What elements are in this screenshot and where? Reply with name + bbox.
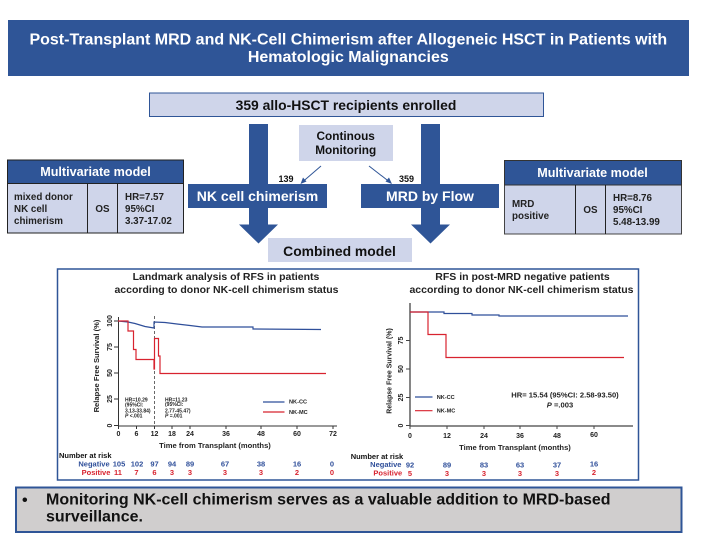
label: 359: 359 (399, 174, 414, 184)
hazard ratio note: P =.003 (547, 400, 573, 410)
y axis tick labels: 50 (107, 369, 114, 377)
title banner: Post-Transplant MRD and NK-Cell Chimerism after Allogeneic HSCT in Patients with (29, 32, 667, 48)
number at risk table: 7 (134, 468, 139, 477)
hazard ratio note: after landmark (165, 398, 191, 420)
number at risk table: 94 (168, 460, 177, 468)
combined model box: Combined model (283, 243, 396, 259)
x axis tick labels: 18 (168, 431, 176, 438)
legend: NK-CC (437, 395, 455, 401)
NK cell chimerism box (188, 184, 327, 208)
number at risk table: 102 (131, 460, 143, 468)
panel: right multivariate table: positive (512, 211, 550, 222)
hazard ratio note: after landmark: 2.77-45.47) (165, 408, 191, 414)
number at risk table: 2 (295, 468, 299, 477)
number at risk table: 3 (518, 469, 522, 478)
x axis tick labels: 36 (516, 433, 524, 440)
panel: left multivariate table (8, 160, 184, 233)
x axis tick labels: 60 (590, 432, 598, 439)
number at risk table: 83 (480, 460, 488, 470)
number at risk table (351, 452, 598, 478)
conclusion callout: surveillance. (46, 508, 143, 526)
number at risk table: 97 (150, 460, 159, 468)
continuous monitoring box (299, 125, 393, 161)
number at risk table: 3 (170, 468, 174, 477)
panel: right multivariate table: MRD (512, 199, 534, 210)
x axis tick labels: 24 (186, 431, 194, 438)
x axis tick labels: 12 (443, 433, 451, 440)
x axis tick labels: 24 (480, 433, 488, 440)
panel: left multivariate table: NK cell (14, 204, 47, 215)
panel: right multivariate table: 95%CI (613, 205, 643, 216)
arrow: monitoring to MRD by flow (369, 166, 392, 184)
legend: NK-CC (289, 400, 307, 406)
chart title: post-MRD negative (409, 271, 634, 296)
chart title: post-MRD negative: according to donor NK-cell chimerism status (409, 284, 634, 296)
number at risk table: 0 (330, 460, 334, 468)
curve: NK-MC left (118, 321, 326, 374)
number at risk table: 16 (590, 460, 598, 468)
continuous monitoring box: Continous (317, 129, 375, 143)
y axis tick labels: 0 (398, 423, 405, 427)
number at risk table: Negative (370, 460, 401, 469)
number at risk table: 89 (186, 460, 194, 468)
y axis tick labels: 100 (107, 315, 114, 327)
number at risk table: 105 (113, 460, 125, 468)
y axis tick labels: 50 (398, 365, 405, 373)
y axis tick labels: 75 (107, 343, 114, 351)
curve: NK-CC right (410, 312, 628, 316)
number at risk table: 5 (408, 469, 412, 478)
panel: right multivariate table: Multivariate model (537, 166, 648, 180)
number at risk table: Number at risk (59, 451, 112, 460)
x axis tick labels: 6 (135, 431, 139, 438)
y axis tick labels: 75 (398, 337, 405, 344)
hazard ratio note: before landmark: HR=10.29 (125, 398, 148, 404)
number at risk table: 16 (293, 460, 301, 468)
axes (114, 317, 337, 429)
number at risk table: Number at risk (351, 452, 404, 461)
number at risk table: Positive (373, 469, 402, 478)
y axis tick labels: 0 (107, 423, 114, 427)
legend (263, 400, 308, 416)
y axis tick labels: 25 (107, 395, 114, 403)
y axis tick labels: 25 (398, 394, 405, 401)
legend: NK-MC (437, 409, 455, 415)
arrow: left down arrow (239, 124, 278, 244)
chart title: landmark analysis (114, 271, 339, 296)
hazard ratio note: before landmark (125, 398, 151, 420)
chart: landmark analysis RFS (59, 271, 339, 477)
x axis tick labels: 60 (293, 431, 301, 438)
number at risk table (59, 451, 334, 477)
number at risk table: 3 (482, 469, 486, 478)
number at risk table: 3 (188, 468, 192, 477)
hazard ratio note: before landmark: 3.13-33.84) (125, 408, 151, 414)
number at risk table: Positive (82, 468, 110, 477)
panel: left multivariate table: chimerism (14, 216, 63, 227)
conclusion callout (16, 488, 682, 532)
number at risk table: 3 (555, 469, 559, 478)
x axis tick labels: 72 (329, 431, 337, 438)
title banner (8, 20, 689, 76)
number at risk table: 38 (257, 460, 265, 468)
number at risk table: 92 (406, 460, 414, 470)
landmark dashed line (154, 316, 156, 426)
hazard ratio note: after landmark: (95%CI: (165, 402, 184, 408)
panel: left multivariate table: 95%CI (125, 204, 155, 215)
x axis title: Time from Transplant (months) (459, 443, 571, 452)
hazard ratio note: before landmark: P <.001 (125, 414, 143, 420)
curve: NK-MC right (410, 312, 624, 358)
y axis tick labels (398, 337, 405, 427)
number at risk table: 3 (223, 468, 227, 477)
arrow: monitoring to NK cell chimerism (300, 166, 321, 184)
NK cell chimerism box: NK cell chimerism (197, 188, 318, 204)
number at risk table: 11 (114, 468, 122, 477)
arrow: right down arrow (411, 124, 450, 244)
panel: right multivariate table: OS (583, 205, 598, 216)
legend (415, 395, 455, 415)
label: 139: 139 (278, 174, 294, 184)
number at risk table: 37 (553, 460, 561, 470)
number at risk table: 89 (443, 460, 451, 470)
title banner: Hematologic Malignancies (248, 49, 449, 66)
panel: right multivariate table: 5.48-13.99 (613, 217, 660, 228)
axes (406, 303, 633, 429)
legend: NK-MC (289, 410, 308, 416)
x axis tick labels: 12 (151, 431, 158, 438)
x axis tick labels: 0 (408, 433, 412, 440)
y axis title: Relapse Free Survival (%) (386, 328, 394, 414)
panel: right multivariate table: HR=8.76 (613, 193, 652, 204)
panel: survival charts frame (58, 269, 638, 480)
hazard ratio note: before landmark: (95%CI: (125, 402, 144, 408)
number at risk table: 2 (592, 468, 596, 477)
number at risk table: 6 (152, 468, 157, 477)
number at risk table: 63 (516, 460, 524, 470)
x axis tick labels: 0 (117, 431, 121, 438)
continuous monitoring box: Monitoring (315, 143, 376, 157)
hazard ratio note: HR= 15.54 (95%CI: 2.58-93.50) (511, 391, 619, 400)
x axis tick labels: 48 (257, 431, 265, 438)
conclusion callout: Monitoring NK-cell chimerism serves as a valuable addition to MRD-based (46, 492, 611, 508)
enrollment box (150, 93, 544, 116)
conclusion callout: • (22, 492, 28, 509)
number at risk table: 0 (330, 468, 334, 477)
y axis tick labels (107, 315, 114, 427)
x axis tick labels: 36 (222, 431, 230, 438)
MRD by flow box (361, 184, 499, 208)
hazard ratio note (511, 391, 619, 410)
panel: left multivariate table: Multivariate model (40, 165, 151, 179)
panel: left multivariate table: mixed donor (14, 192, 73, 203)
chart title: landmark analysis: according to donor NK-cell chimerism status (114, 284, 339, 296)
chart title: post-MRD negative: RFS in post-MRD negative patients (435, 271, 610, 283)
chart: RFS in post-MRD negative patients (351, 271, 634, 478)
x axis title: Time from Transplant (months) (159, 441, 271, 450)
panel: left multivariate table: HR=7.57 (125, 192, 164, 203)
hazard ratio note: after landmark: HR=11.23 (165, 398, 188, 404)
x axis tick labels (117, 431, 337, 438)
curve: NK-CC left (118, 321, 321, 330)
enrollment box: 359 allo-HSCT recipients enrolled (236, 97, 456, 113)
y axis title: Relapse Free Survival (%) (92, 319, 101, 412)
number at risk table: 3 (445, 469, 449, 478)
panel: right multivariate table (504, 160, 682, 234)
panel: left multivariate table: 3.37-17.02 (125, 216, 172, 227)
panel: left multivariate table: OS (95, 204, 110, 215)
number at risk table: Negative (78, 460, 110, 468)
x axis tick labels: 48 (553, 433, 561, 440)
x axis tick labels (408, 432, 598, 440)
combined model box (268, 238, 412, 262)
number at risk table: 67 (221, 460, 229, 468)
MRD by flow box: MRD by Flow (386, 188, 474, 204)
number at risk table: 3 (259, 468, 263, 477)
hazard ratio note: after landmark: P =.001 (165, 414, 183, 420)
chart title: landmark analysis: Landmark analysis of RFS in patients (133, 271, 320, 283)
